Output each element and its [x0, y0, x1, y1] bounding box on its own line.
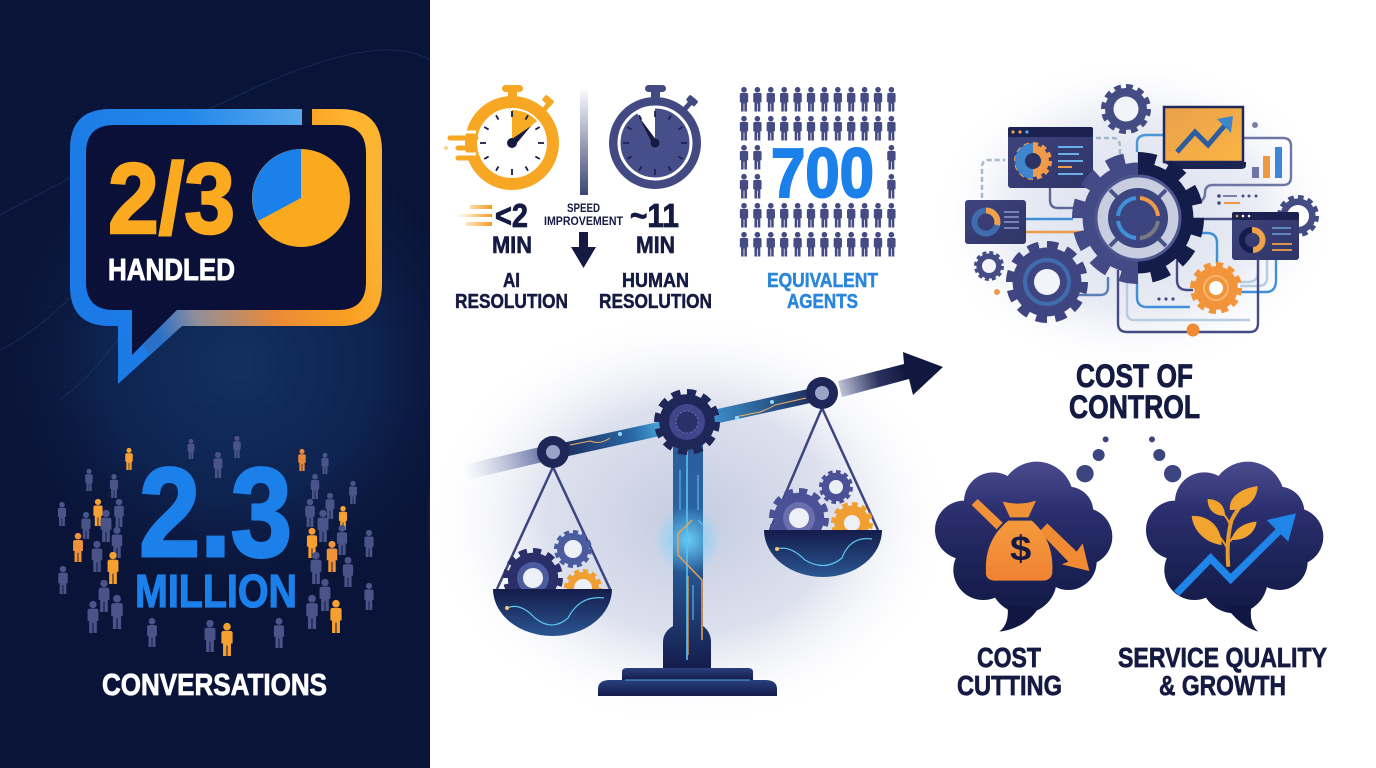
human resolution stat: RESOLUTION: [599, 291, 712, 313]
pie chart: two thirds: [252, 149, 350, 247]
label: service quality and growth: SERVICE QUALITY: [1118, 642, 1327, 673]
dashboard: top left: [1008, 127, 1093, 188]
left pan: [493, 589, 612, 636]
thought bubble dots: left: [1076, 436, 1109, 482]
AI resolution stat: RESOLUTION: [455, 291, 568, 313]
beam: [553, 386, 824, 459]
label: cost cutting: [957, 642, 1062, 701]
right pivot: [806, 377, 838, 409]
speed lines: [457, 205, 492, 226]
large gear: lower left: [1011, 246, 1083, 318]
soft background glow: scale: [425, 310, 955, 730]
speed improvement label and arrow: IMPROVEMENT: [544, 214, 624, 228]
label: equivalent agents: EQUIVALENT: [767, 270, 878, 292]
orange gear: [1193, 265, 1239, 311]
stat: 2/3: 2/3: [108, 143, 235, 255]
small accent dots: [994, 122, 1258, 336]
people grid with 700: [740, 87, 896, 256]
stopwatch: AI, orange: [444, 85, 555, 184]
human resolution stat: MIN: [636, 232, 675, 259]
soft background glow: gears: [930, 55, 1340, 375]
connector lines: [982, 135, 1291, 332]
beam tail fading left: [463, 447, 543, 480]
bar chart: [1252, 147, 1282, 178]
icon: money bag with down arrow: [972, 499, 1089, 581]
stat: 2.3 million: 2.3: [139, 442, 292, 583]
label: equivalent agents: AGENTS: [787, 291, 858, 313]
speed improvement label and arrow: SPEED: [567, 201, 600, 215]
gear: right behind dashboard: [1280, 198, 1316, 234]
trend arrow to the right: [838, 352, 943, 397]
divider bar: [580, 87, 588, 195]
central gear: [1080, 160, 1196, 276]
heading: cost of control: COST OF: [1076, 358, 1193, 394]
panel: dark left column: [0, 0, 430, 768]
speech bubble: 2/3 handled: [70, 109, 382, 384]
label: cost cutting: CUTTING: [957, 670, 1062, 701]
human resolution stat: HUMAN: [622, 270, 689, 292]
right pan: [764, 530, 882, 577]
icon: money bag with down arrow: $: [1010, 530, 1032, 569]
label: cost cutting: COST: [977, 642, 1041, 673]
small gear: top: [1104, 87, 1148, 131]
thought bubble dots: right: [1149, 436, 1181, 482]
laptop with growth chart: [1163, 107, 1246, 169]
crowd of people icons: [58, 436, 374, 656]
scale base: [598, 668, 777, 696]
thought bubble: cost cutting: [935, 462, 1112, 632]
label: service quality and growth: & GROWTH: [1159, 670, 1286, 701]
right pan strings: [770, 408, 878, 530]
AI resolution stat: AI: [503, 270, 520, 292]
AI resolution stat: MIN: [492, 232, 532, 259]
center gear pivot: [658, 393, 716, 451]
heading: cost of control: CONTROL: [1069, 389, 1200, 425]
gears in right pan: [769, 470, 873, 530]
stat: 700: 700: [771, 134, 874, 212]
heading: cost of control: [1069, 358, 1200, 425]
human resolution stat: ~11: [630, 197, 679, 234]
dashboard: left donut: [965, 200, 1026, 244]
label: equivalent agents: [767, 270, 878, 313]
stat: 2.3 million: MILLION: [135, 565, 297, 617]
thought bubble: service quality and growth: [1146, 462, 1323, 632]
gears in left pan: [503, 530, 602, 589]
AI resolution stat: [455, 197, 568, 313]
speed improvement label and arrow: [544, 201, 624, 268]
AI resolution stat: <2: [495, 197, 528, 234]
small gear: lower left: [976, 253, 1002, 279]
label: conversations: CONVERSATIONS: [102, 667, 327, 702]
balance scale: [463, 352, 943, 696]
gears and dashboards cluster: [965, 87, 1316, 336]
icon: plant with rising arrow: [1177, 486, 1296, 593]
dashboard: right donut: [1232, 212, 1299, 260]
left pan strings: [497, 467, 610, 589]
label: service quality and growth: [1118, 642, 1327, 701]
stopwatch: human, navy: [609, 85, 701, 189]
left pivot: [537, 436, 569, 468]
human resolution stat: [599, 197, 712, 313]
label: handled: HANDLED: [108, 252, 235, 287]
scale column: [654, 440, 722, 668]
